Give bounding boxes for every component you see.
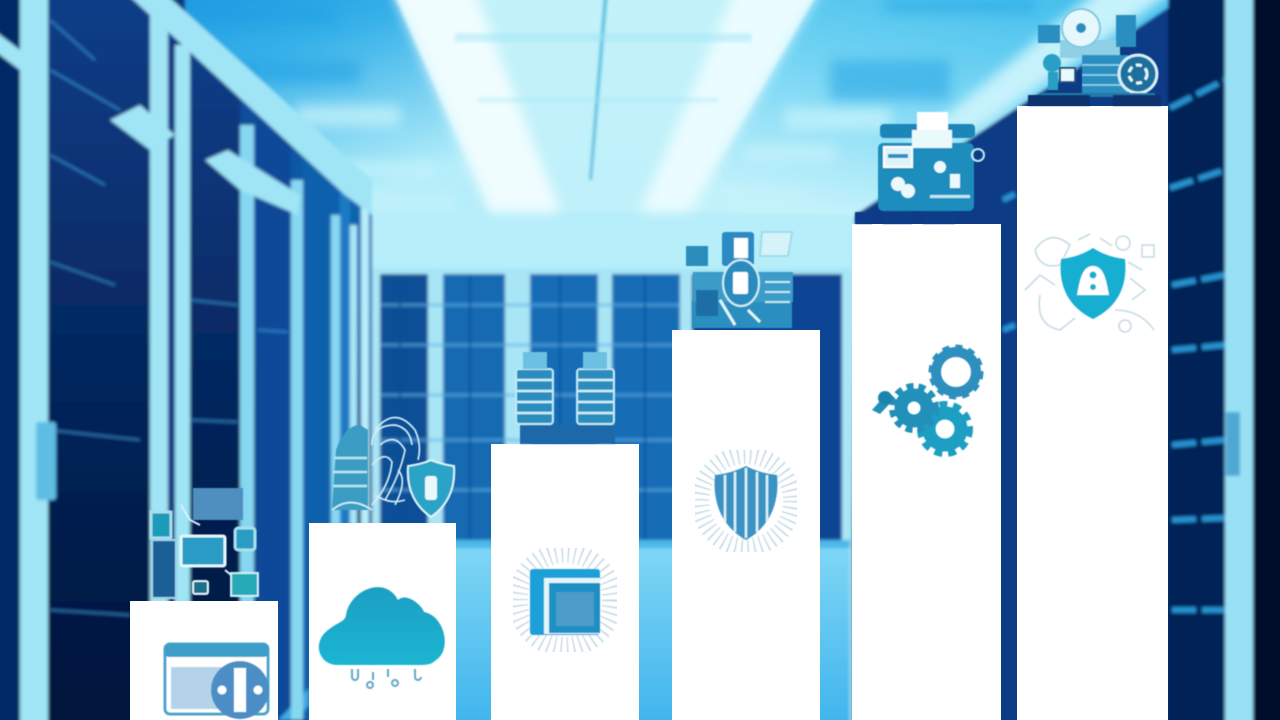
icon: network devices on bar 1: [151, 488, 258, 598]
bar 6: [1017, 106, 1168, 720]
ceiling light strips: [295, 105, 890, 209]
ceiling right section: [690, 0, 1210, 215]
icon: cluster of gears: [872, 347, 981, 454]
icon: equipment box on bar 5: [855, 112, 984, 224]
left rack glow lines: [50, 20, 288, 615]
icon: server, fingerprint and shield on bar 2: [332, 418, 454, 517]
icon: striped shield with radial lines: [700, 455, 792, 547]
icon: cloud with connectors: [319, 587, 445, 688]
icon: browser window with lock badge: [165, 644, 269, 719]
bar 3: [491, 444, 639, 720]
bar 2: [309, 523, 456, 720]
right rack light dashes: [1003, 80, 1225, 610]
back wall server racks: [370, 268, 852, 550]
bar 4: [672, 330, 820, 720]
icon: server equipment with gauge on bar 6: [1028, 9, 1161, 106]
icon: padlock shield with doodles: [1025, 234, 1154, 332]
left rack frames: [0, 0, 372, 720]
icon: processor chip with radial circuit lines: [518, 553, 612, 647]
right server racks: [852, 0, 1280, 720]
floor: [300, 548, 850, 720]
icon: security lock devices on bar 4: [686, 232, 793, 328]
ceiling centre light panel: [388, 0, 825, 212]
bar 1: [130, 601, 278, 720]
icon: two server stacks on bar 3: [516, 352, 615, 444]
ceiling left section: [130, 0, 490, 212]
bar 5: [852, 224, 1001, 720]
ceiling right light beam: [880, 0, 1190, 170]
left server racks: [0, 0, 372, 720]
